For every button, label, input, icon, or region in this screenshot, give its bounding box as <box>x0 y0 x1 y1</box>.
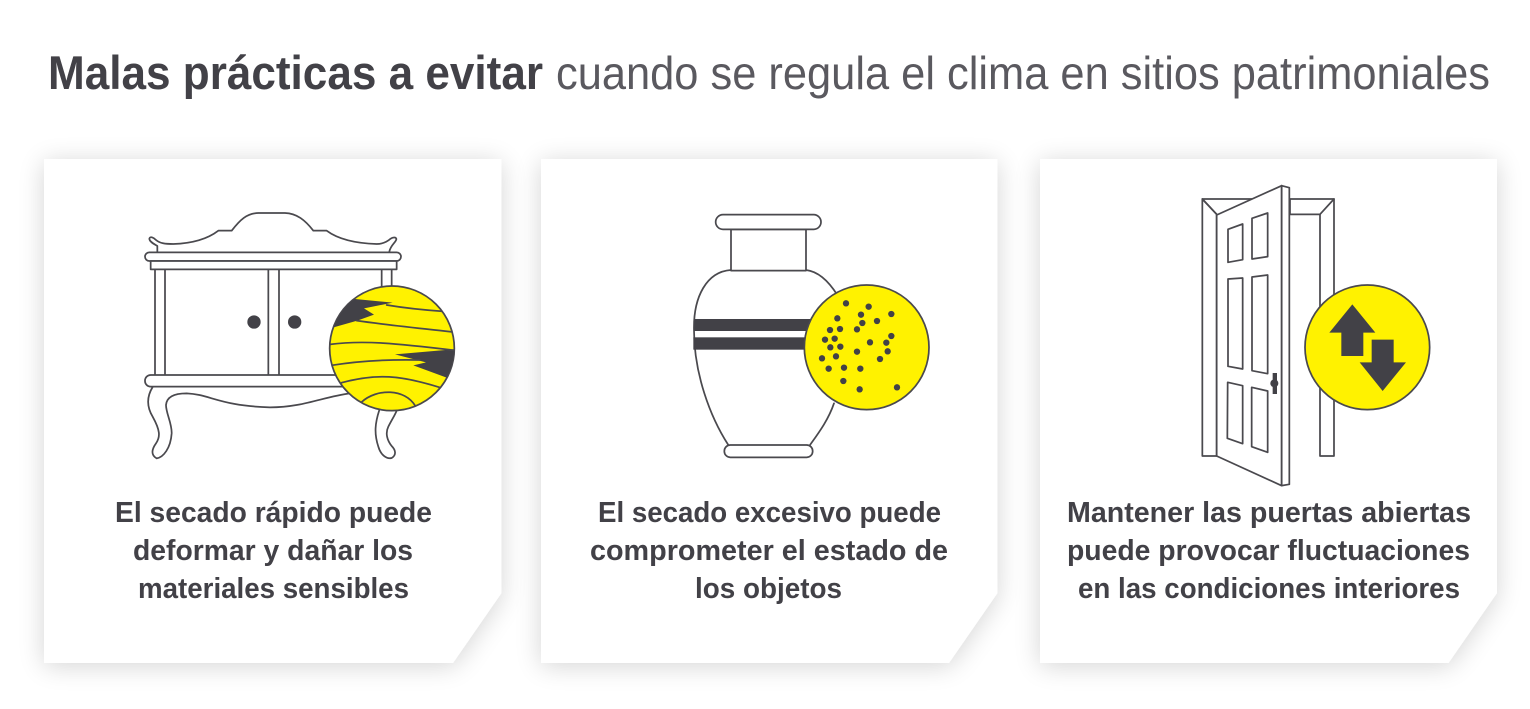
card background <box>541 159 998 663</box>
panel: open doors <box>1040 159 1497 663</box>
title <box>48 46 1490 99</box>
caption <box>1067 497 1471 605</box>
caption: El secado excesivo puede <box>598 497 941 529</box>
card background <box>44 159 502 663</box>
caption: los objetos <box>695 573 842 605</box>
caption: puede provocar fluctuaciones <box>1067 535 1470 567</box>
caption: Mantener las puertas abiertas <box>1067 497 1471 529</box>
card background <box>1040 159 1497 663</box>
caption: deformar y dañar los <box>133 535 413 567</box>
caption <box>590 497 948 605</box>
caption: en las condiciones interiores <box>1078 573 1460 605</box>
caption: materiales sensibles <box>138 573 409 605</box>
title: Malas prácticas a evitar <box>48 46 543 99</box>
caption: El secado rápido puede <box>115 497 432 529</box>
icon: open door with arrows magnifier <box>1202 186 1430 486</box>
caption <box>115 497 432 605</box>
icon: cabinet with cracked magnifier <box>145 213 457 458</box>
title: cuando se regula el clima en sitios patrimoniales <box>556 47 1490 99</box>
panel: excessive drying <box>541 159 998 663</box>
panel: rapid drying <box>44 159 502 663</box>
caption: comprometer el estado de <box>590 535 948 567</box>
icon: vase with speckled magnifier <box>693 215 929 457</box>
